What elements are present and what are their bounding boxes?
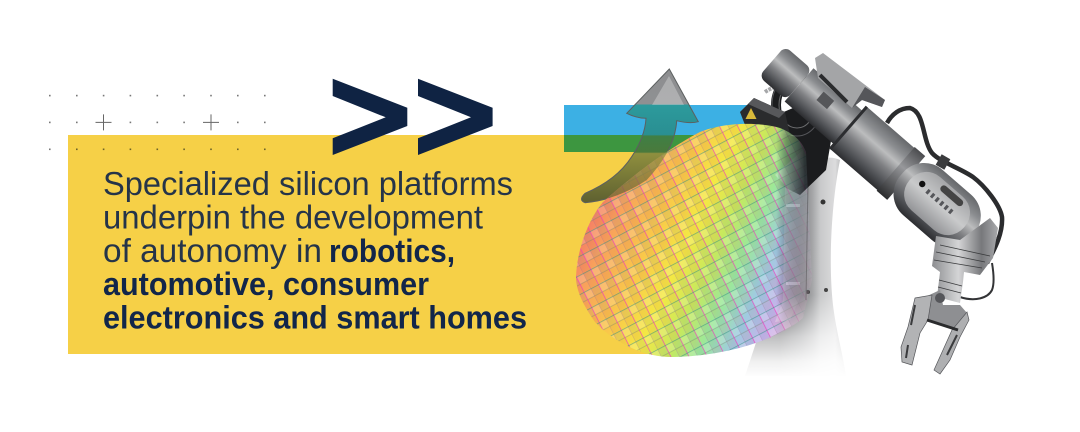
- headline text: underpin the development: [103, 199, 484, 236]
- motor box with warning triangle: [740, 98, 790, 135]
- dark shoulder housing: [765, 105, 832, 195]
- headline text: automotive, consumer: [103, 266, 429, 302]
- arrow tail seen through wafer: [606, 151, 668, 199]
- blue band: [564, 105, 754, 135]
- headline text: [103, 166, 527, 336]
- robot mounting frame: [745, 158, 846, 376]
- gripper: [901, 290, 969, 374]
- headline text: Specialized silicon platforms: [103, 166, 513, 203]
- robot arm: [740, 39, 1002, 376]
- top mounting plate: [815, 53, 885, 108]
- yellow panel: [68, 135, 658, 354]
- main cable: [887, 108, 1002, 299]
- green band: [564, 135, 694, 152]
- headline text: of autonomy in: [103, 233, 322, 270]
- dot and plus grid: [49, 95, 266, 150]
- headline text: electronics and smart homes: [103, 300, 527, 336]
- double chevron: [333, 79, 493, 155]
- wrist housing: [932, 218, 998, 303]
- silicon wafer: [576, 124, 812, 357]
- icon: upward arrow: [582, 69, 698, 203]
- black cable bundle: [765, 74, 822, 136]
- headline text: robotics,: [329, 233, 455, 269]
- upper arm segments: [752, 39, 992, 258]
